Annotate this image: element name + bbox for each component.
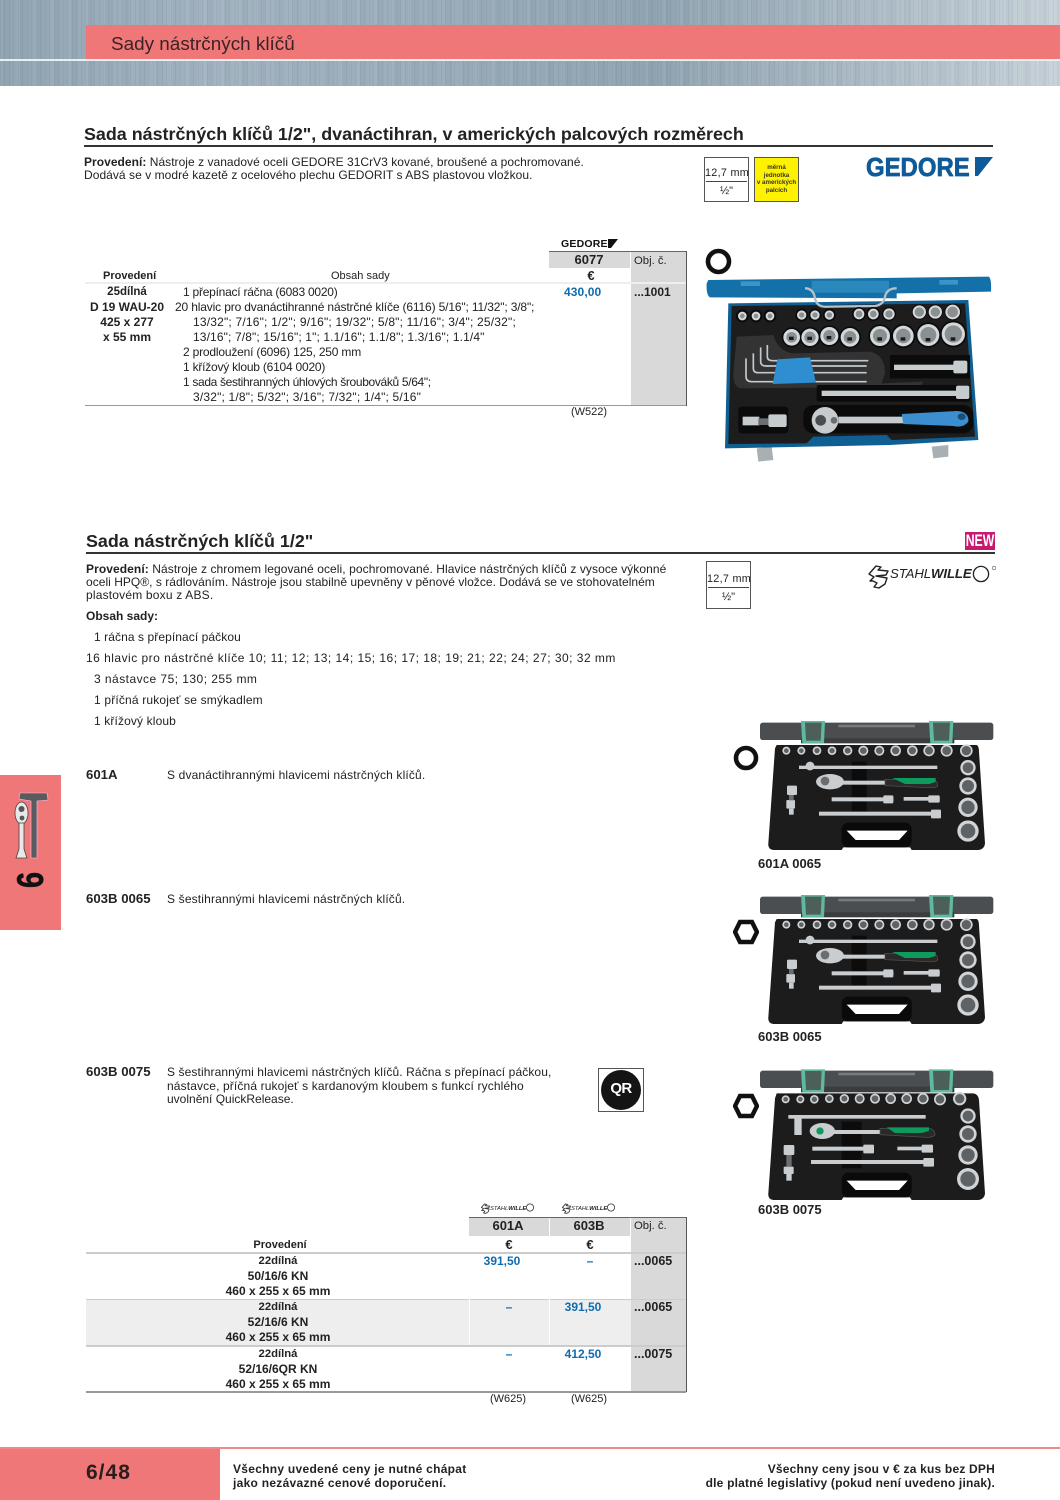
table: Gedore set: 2 prodloužení (6096) 125, 250 mm — [183, 345, 361, 359]
icon: ratchet and hammer — [14, 792, 48, 858]
price: 430,00 — [564, 285, 601, 299]
footer note right — [706, 1462, 995, 1490]
description: Gedore set: Dodává se v modré kazetě z ocelového plechu GEDORIT s ABS plastovou vložkou. — [84, 168, 532, 182]
table: Stahlwille set: – — [587, 1254, 593, 1268]
page number block — [0, 1449, 220, 1500]
image caption 603B 0075: 603B 0075 — [758, 1202, 822, 1217]
table: Stahlwille set: 603B — [573, 1218, 605, 1233]
tools — [784, 1115, 934, 1181]
brand logo small 601A: STAHLWILLE — [490, 1206, 526, 1212]
contents list: 1 ráčna s přepínací páčkou — [94, 630, 241, 644]
footer note right: Všechny ceny jsou v € za kus bez DPH — [768, 1462, 995, 1476]
contents list: 1 křížový kloub — [94, 714, 176, 728]
tools — [786, 936, 941, 992]
column headers: 601A — [492, 1218, 524, 1233]
variant 603B 0075 — [86, 1064, 551, 1106]
photo: Stahlwille case 603B 0065 — [760, 895, 994, 1024]
logo: STAHLWILLE — [868, 565, 996, 589]
table: Gedore set: Obsah sady — [331, 270, 390, 282]
section heading: Stahlwille set: Sada nástrčných klíčů 1/2" — [86, 531, 313, 551]
sockets — [782, 744, 979, 842]
brand logo small 603B: STAHLWILLE — [571, 1206, 607, 1212]
footer note right: dle platné legislativy (pokud není uvedeno jinak). — [706, 1476, 995, 1490]
variant 603B 0065: S šestihrannými hlavicemi nástrčných klíčů. — [167, 892, 405, 906]
description: Gedore set — [84, 155, 584, 182]
QR badge — [598, 1068, 644, 1112]
yellow badge: american inches: jednotka — [764, 172, 789, 178]
header title bar — [86, 25, 1060, 59]
table: Stahlwille set: 460 x 255 x 65 mm — [226, 1284, 330, 1298]
header band — [0, 0, 1060, 86]
table: Gedore set: D 19 WAU-20 — [90, 300, 164, 314]
universal joint — [743, 414, 787, 427]
table: Stahlwille set: 52/16/6QR KN — [239, 1362, 317, 1376]
variant 601A: S dvanáctihrannými hlavicemi nástrčných klíčů. — [167, 768, 425, 782]
table: Gedore set — [85, 238, 687, 418]
table: Stahlwille set: 391,50 — [565, 1300, 601, 1314]
image caption 601A 0065: 601A 0065 — [758, 856, 821, 871]
table: Gedore set: 13/32"; 7/16"; 1/2"; 9/16"; 19/32"; 5/8"; 11/16"; 3/4"; 25/32"; — [193, 315, 516, 329]
size badge 12,7 mm — [704, 157, 749, 202]
row 3: 22dílná — [259, 1348, 297, 1360]
table: Stahlwille set: – — [506, 1347, 512, 1361]
page number: 6/48 — [86, 1461, 131, 1484]
table: Stahlwille set: Obj. č. — [634, 1220, 667, 1232]
size badge 12,7 mm: 12,7 mm — [707, 573, 751, 585]
size badge 12,7 mm: ½" — [720, 185, 733, 197]
variant column: 25dílná — [107, 286, 147, 298]
variant 601A: 601A — [86, 767, 118, 782]
variant 603B 0075: nástavce, příčná rukojeť s kardanovým kloubem s funkcí rychlého — [167, 1079, 524, 1093]
variant 603B 0075: 603B 0075 — [86, 1064, 151, 1079]
footnote code: (W522) — [571, 406, 607, 418]
description: Stahlwille set: Provedení: Nástroje z chromem legované oceli, pochromované. Hlavice nástrčných klíčů z vysoce výkonné — [86, 562, 666, 576]
table: Stahlwille set: 460 x 255 x 65 mm — [226, 1377, 330, 1391]
brand logo small 601A — [481, 1204, 534, 1214]
table: Stahlwille set: (W625) — [571, 1393, 607, 1405]
row 1: 22dílná — [259, 1255, 297, 1267]
side tab: chapter 6 — [0, 775, 61, 930]
icon: twelve-point socket — [706, 248, 732, 274]
header title: Sady nástrčných klíčů — [111, 34, 295, 55]
variant 603B 0065 — [86, 891, 405, 906]
section heading: Gedore set: Sada nástrčných klíčů 1/2", dvanáctihran, v amerických palcových rozměrech — [84, 124, 744, 144]
table: Stahlwille set: 50/16/6 KN — [248, 1269, 308, 1283]
table: Gedore set: x 55 mm — [103, 330, 151, 344]
table: Stahlwille set — [86, 1204, 687, 1405]
logo: STAHLWILLE: STAHLWILLE — [890, 566, 972, 581]
table: Stahlwille set: ...0065 — [634, 1300, 672, 1314]
table: Gedore set: 1 křížový kloub (6104 0020) — [183, 360, 325, 374]
row 2: 22dílná — [259, 1301, 297, 1313]
table: Stahlwille set: € — [505, 1237, 513, 1252]
footer note left: jako nezávazné cenové doporučení. — [233, 1476, 446, 1490]
sockets — [736, 304, 967, 348]
variant 603B 0075: S šestihrannými hlavicemi nástrčných klíčů. Ráčna s přepínací páčkou, — [167, 1065, 551, 1079]
contents list: 3 nástavce 75; 130; 255 mm — [94, 672, 257, 686]
photo: Gedore socket set in blue case — [706, 276, 992, 462]
variant 603B 0065: 603B 0065 — [86, 891, 151, 906]
table: Gedore set: 1 sada šestihranných úhlových šroubováků 5/64"; — [183, 375, 431, 389]
icon: hexagon socket 603B 0065 — [733, 920, 759, 944]
brand logo small: GEDORE — [561, 238, 608, 250]
footer note left: Všechny uvedené ceny je nutné chápat — [233, 1462, 466, 1476]
table: Stahlwille set: € — [586, 1237, 594, 1252]
table: Stahlwille set: ...0075 — [634, 1347, 672, 1361]
table: Gedore set: 425 x 277 — [100, 315, 154, 329]
description: Stahlwille set: plastovém boxu z ABS. — [86, 588, 213, 602]
footer — [0, 1447, 1060, 1500]
table: Gedore set: € — [587, 268, 595, 283]
icon: twelve-point socket 601A — [734, 746, 758, 770]
photo: Stahlwille case 603B 0075 — [760, 1069, 994, 1200]
sockets — [782, 1092, 979, 1190]
size badge 12,7 mm: ½" — [722, 591, 735, 603]
variant 603B 0075: uvolnění QuickRelease. — [167, 1092, 294, 1106]
table: Gedore set: 20 hlavic pro dvanáctihranné nástrčné klíče (6116) 5/16"; 11/32"; 3/8"; — [175, 300, 534, 314]
table: Stahlwille set: 460 x 255 x 65 mm — [226, 1330, 330, 1344]
yellow badge: american inches: měrná — [767, 164, 786, 171]
yellow badge: american inches: palcích — [766, 186, 787, 194]
logo: GEDORE: GEDORE — [866, 152, 970, 182]
table: Stahlwille set: – — [506, 1300, 512, 1314]
footnote codes: (W625) — [490, 1393, 526, 1405]
order number: ...1001 — [634, 285, 671, 299]
table: Gedore set: 13/16"; 7/8"; 15/16"; 1"; 1.1/16"; 1.1/8"; 1.3/16"; 1.1/4" — [193, 330, 485, 344]
image caption 603B 0065: 603B 0065 — [758, 1029, 822, 1044]
description: Stahlwille set — [86, 562, 666, 602]
yellow badge: american inches: v amerických — [757, 179, 796, 186]
QR badge: QR — [610, 1080, 632, 1097]
table: Stahlwille set: Provedení — [253, 1239, 307, 1251]
chapter number: 6 — [10, 872, 51, 888]
contents list: 16 hlavic pro nástrčné klíče 10; 11; 12; 13; 14; 15; 16; 17; 18; 19; 21; 22; 24; 27; 30; 32 mm — [86, 651, 616, 665]
brand logo small 603B — [562, 1204, 615, 1214]
icon: hexagon socket 603B 0075 — [733, 1094, 759, 1118]
yellow badge: american inches — [754, 157, 799, 202]
table: Stahlwille set: ...0065 — [634, 1254, 672, 1268]
extension bars — [822, 361, 969, 399]
ratchet — [812, 407, 968, 434]
sockets — [782, 918, 979, 1016]
photo: Stahlwille case 601A — [760, 721, 994, 850]
table: Gedore set: Obj. č. — [634, 255, 667, 267]
contents column: 1 přepínací ráčna (6083 0020) — [183, 285, 337, 299]
contents list: Obsah sady: — [86, 609, 158, 623]
description: Gedore set: Provedení: Nástroje z vanadové oceli GEDORE 31CrV3 kované, broušené a pochromované. — [84, 155, 584, 169]
footer note left — [232, 1462, 466, 1490]
size badge 12,7 mm: 12,7 mm — [705, 167, 749, 179]
table: Gedore set: Provedení — [103, 270, 156, 282]
hex keys — [746, 345, 868, 382]
description: Stahlwille set: oceli HPQ®, s rádlováním. Nástroje jsou stabilně upevněny v pěnové vložce. Dodává se ve stohovatelném — [86, 575, 655, 589]
size badge 12,7 mm — [706, 561, 751, 609]
tools — [786, 762, 941, 818]
contents list: 1 příčná rukojeť se smýkadlem — [94, 693, 263, 707]
contents list — [86, 609, 616, 728]
table: Stahlwille set: 412,50 — [565, 1347, 601, 1361]
column headers: 6077 — [575, 252, 603, 267]
table: Stahlwille set: 52/16/6 KN — [248, 1315, 308, 1329]
table: Gedore set: 3/32"; 1/8"; 5/32"; 3/16"; 7/32"; 1/4"; 5/16" — [193, 390, 421, 404]
table: Stahlwille set: 391,50 — [484, 1254, 520, 1268]
